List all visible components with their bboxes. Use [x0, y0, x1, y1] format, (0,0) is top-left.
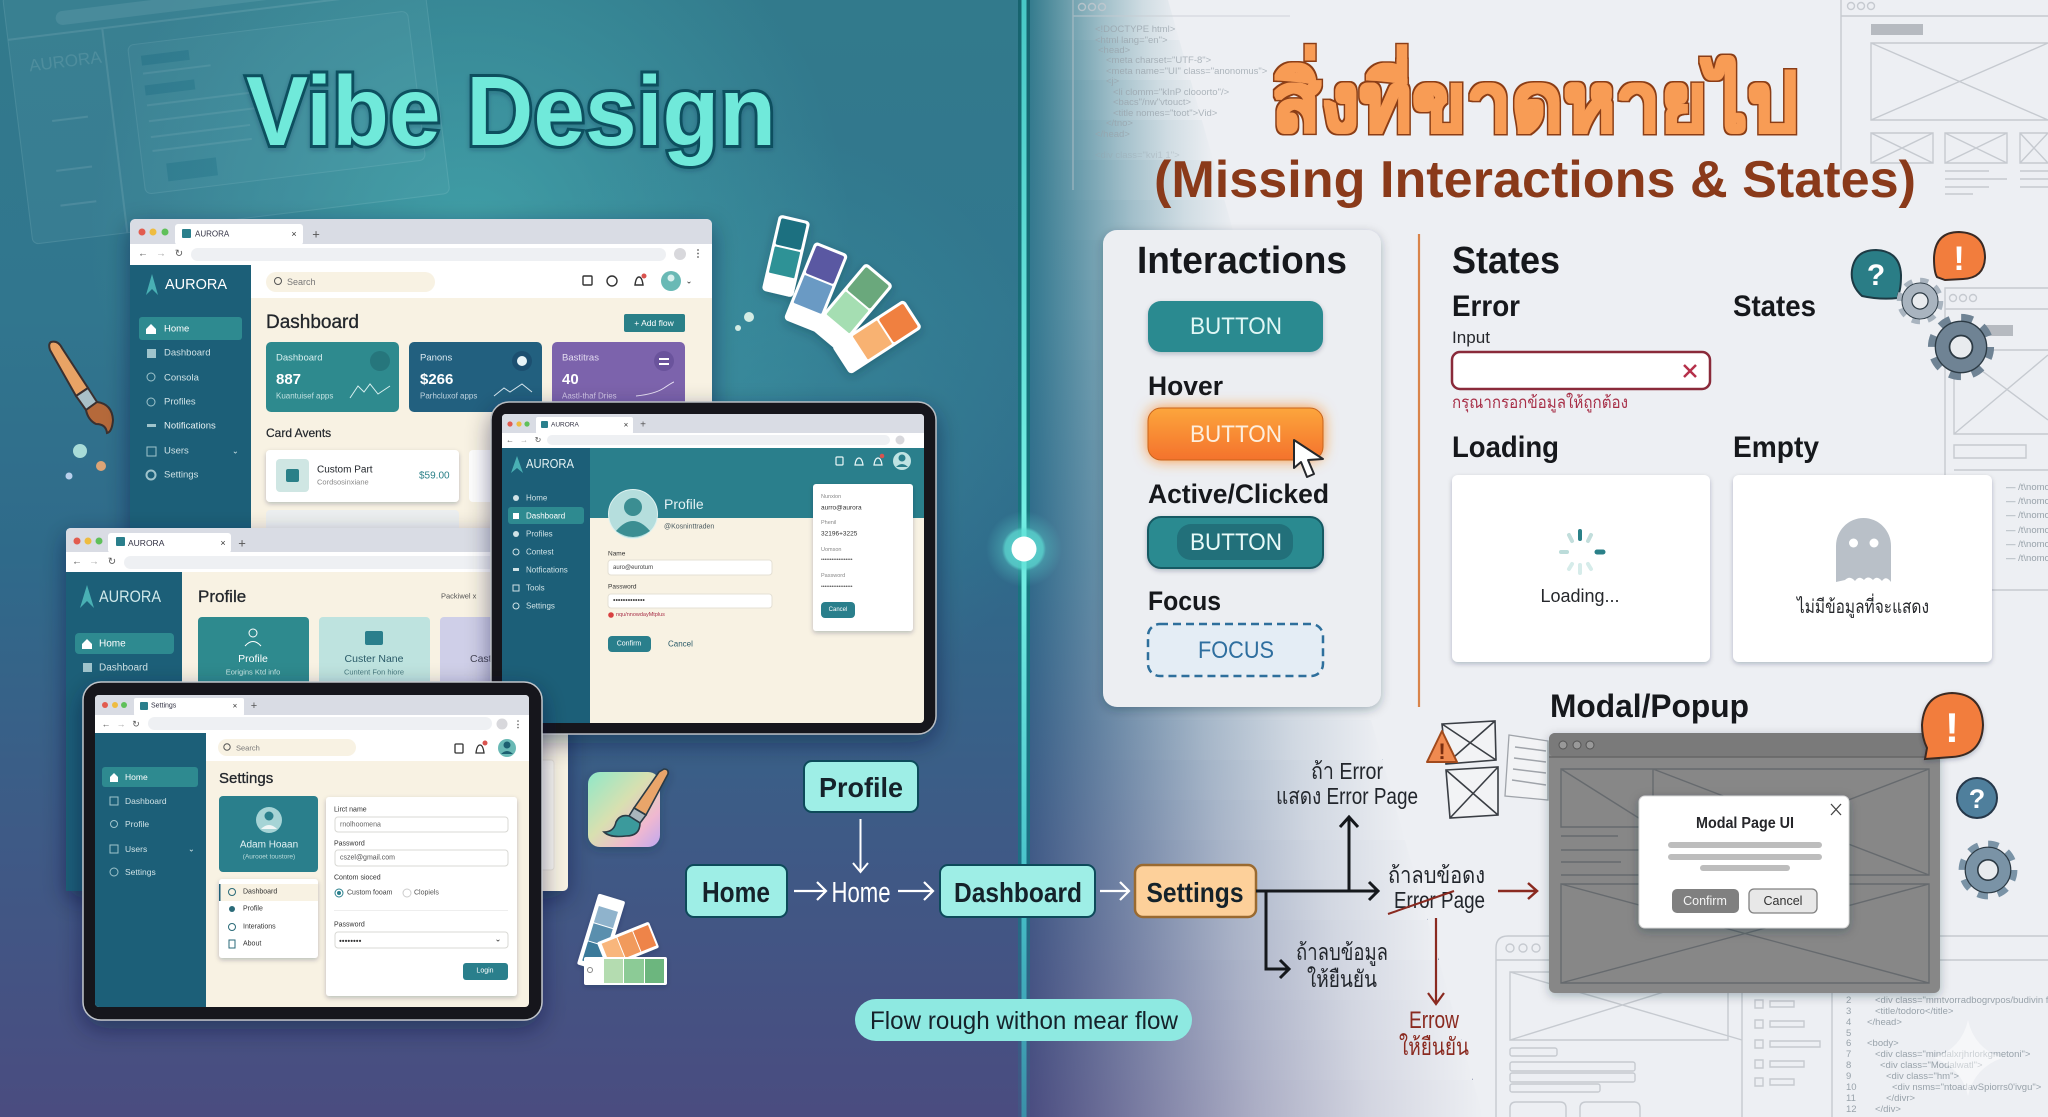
icon: ghost — [1836, 518, 1891, 582]
sidebar: AURORA — [165, 277, 227, 293]
branch label: if deleted, error page — [1388, 862, 1485, 914]
wireframe and code, bottom right: <div class="mindalxrjhrlorkgmetoni"> — [1875, 1049, 2031, 1060]
wireframe and code, bottom right: 11 — [1846, 1093, 1856, 1104]
sidebar: Home — [125, 772, 148, 782]
sidebar: Profiles — [164, 396, 196, 408]
stat card: Panons: Parhcluxof apps — [420, 392, 477, 400]
stat card: Dashboard: 887 — [276, 371, 301, 388]
icon: colour swatches fan, top — [762, 214, 922, 375]
heading: Modal/Popup: Modal/Popup — [1550, 688, 1749, 724]
icon: question bubble, top right — [1852, 250, 1901, 299]
form: name and password — [608, 550, 772, 618]
avatar — [608, 490, 658, 538]
subtitle: Missing Interactions & States: (Missing Interactions & States) — [1154, 151, 1916, 209]
faint background browser, top left: AURORA — [28, 48, 103, 75]
branch label: confirm delete: ให้ยืนยัน — [1307, 966, 1377, 992]
flow node: Dashboard: Dashboard — [954, 877, 1082, 908]
title: Vibe Design: Vibe Design — [246, 56, 776, 166]
address bar — [95, 715, 529, 733]
top bar — [251, 265, 712, 298]
tile: Custer Name — [319, 617, 430, 687]
menu card — [219, 879, 318, 958]
sidebar: Home — [526, 494, 548, 502]
menu card: About — [243, 940, 261, 948]
code panel, top of right side — [1073, 0, 1290, 190]
address bar: ← — [102, 719, 110, 729]
icon: question circle — [1957, 778, 1997, 818]
wireframe and code, bottom right: <body> — [1867, 1038, 1899, 1049]
address bar: → — [89, 556, 99, 568]
address bar: ↻ — [132, 719, 140, 729]
icon: exclamation bubble — [1922, 693, 1983, 759]
menu card: Interations — [243, 924, 276, 930]
address bar: → — [520, 436, 528, 444]
sidebar: Notifications — [164, 420, 216, 432]
code panel, top of right side: <li clomm="kInP clooorto"/> — [1113, 87, 1230, 98]
decorative dots near swatches — [735, 312, 754, 331]
sidebar: Settings — [125, 867, 156, 877]
list card: second — [469, 450, 529, 502]
detail card: Uomson — [821, 547, 841, 553]
detail card: Password — [821, 573, 845, 579]
code panel, top of right side: <meta name="UI" class="anonomus"> — [1106, 66, 1268, 77]
error input field — [1452, 352, 1710, 389]
top bar: Search — [287, 277, 316, 287]
panel: Interactions — [1103, 230, 1381, 707]
stat card: Panons: $266 — [420, 371, 453, 388]
wireframe and code, bottom right: </divr> — [1886, 1093, 1915, 1104]
form: name and password: auro@eurotum — [613, 565, 653, 571]
form card — [326, 797, 517, 996]
address bar: ← — [138, 248, 148, 260]
heading: States: States — [1452, 240, 1560, 282]
caption pill: Flow rough withon mear flow — [870, 1007, 1179, 1035]
branch label: if deleted, error page: ถ้าลบข้อดง — [1388, 862, 1485, 888]
wireframe and code, bottom right: <div class="Modalwatl"> — [1880, 1060, 1983, 1071]
wireframe sketches beside modal — [1427, 721, 1548, 818]
form card: •••••••• — [339, 936, 362, 946]
address bar: ← — [506, 436, 514, 444]
stat card: Bastitras: Bastitras — [562, 352, 599, 364]
icon: gear — [1964, 846, 2012, 894]
placeholder text bars — [1668, 842, 1822, 871]
icon: question bubble, top right: ? — [1867, 259, 1885, 292]
icon: exclamation bubble, top right — [1934, 232, 1985, 280]
form card: ⌄ — [495, 934, 501, 944]
icon: paintbrush tile — [588, 769, 668, 847]
button: focus: FOCUS — [1198, 637, 1274, 664]
tile: Profile: Profile — [238, 653, 268, 665]
heading: Settings: Settings — [219, 770, 273, 787]
address bar: ↻ — [108, 556, 116, 568]
stat card: Bastitras: 40 — [562, 371, 579, 388]
error message: กรุณากรอกข้อมูลให้ถูกต้อง — [1452, 392, 1628, 413]
list card: third — [266, 510, 459, 550]
small label: Packiwel: Packiwel x — [441, 592, 477, 600]
label: no data: ไม่มีข้อมูลที่จะแสดง — [1795, 593, 1929, 618]
tile: Custer Name: Custer Nane — [345, 653, 404, 665]
detail card — [813, 484, 913, 631]
form: name and password: nqu/nnowdayMtplus — [616, 612, 665, 618]
sidebar: Home — [99, 638, 126, 650]
code panel, top of right side: <div class="kvi1 1"> — [1095, 150, 1180, 161]
swatch card: green — [811, 262, 893, 352]
tile: third — [440, 617, 500, 687]
heading: Loading: Loading — [1452, 431, 1559, 464]
teal header band — [590, 448, 924, 518]
sidebar: Home — [164, 324, 189, 334]
button: Add flow — [624, 314, 685, 332]
tab bar — [66, 528, 568, 553]
tablet: Profile screen — [491, 402, 936, 734]
modal title: Modal Page UI — [1696, 815, 1794, 832]
heading: Card Avents: Card Avents — [266, 426, 331, 440]
arrow: Home label to Dashboard — [898, 882, 933, 900]
code panel, top of right side: <head> — [1098, 45, 1131, 56]
sidebar: Profiles — [526, 530, 553, 538]
tab bar — [130, 219, 712, 245]
branch label: confirm delete: ถ้าลบข้อมูล — [1296, 939, 1388, 966]
address bar: ⋮ — [514, 719, 522, 729]
form card: Custom fooam — [347, 890, 393, 896]
detail card: •••••••••••••••••• — [821, 557, 853, 563]
white panel behind tablet — [530, 760, 554, 870]
detail card: Nunxion — [821, 494, 841, 500]
centre divider line with glowing orb — [986, 0, 1062, 1117]
sketch: image placeholders — [1442, 721, 1498, 818]
top bar: ⌄ — [686, 276, 692, 286]
swatch card: teal — [762, 214, 810, 298]
heading: Empty: Empty — [1733, 431, 1819, 464]
branch label: if error show error page: แสดง Error Page — [1276, 783, 1418, 809]
title: Thai heading: สิ่งที่ขาดหายไป — [1272, 46, 1798, 149]
code panel, top of right side: </tno> — [1106, 118, 1133, 129]
button: Add flow: + Add flow — [634, 318, 675, 328]
button: default: BUTTON — [1190, 313, 1282, 340]
sidebar: Profile — [125, 819, 149, 829]
tab bar: AURORA — [128, 538, 165, 548]
wireframe and code, bottom right: 12 — [1846, 1104, 1857, 1115]
user card: Adam Hoaan — [240, 840, 298, 850]
sidebar: Contest — [526, 548, 554, 556]
branch label: confirm delete — [1296, 939, 1388, 992]
sidebar — [66, 572, 182, 891]
tab bar: × — [624, 420, 629, 430]
wireframe and code, bottom right: 8 — [1846, 1060, 1851, 1071]
tab bar: Settings — [151, 702, 177, 710]
wireframe and code, bottom right: <div nsms="ntoadavSpiorrs0'ivgu"> — [1892, 1082, 2042, 1093]
list card: Custom Part: Custom Part — [317, 464, 373, 476]
sidebar: Users — [125, 844, 147, 854]
sidebar — [95, 733, 206, 1007]
tab bar: AURORA — [551, 422, 579, 428]
heading: Dashboard: Dashboard — [266, 312, 359, 333]
red arrow right — [1498, 883, 1537, 899]
profile name: Profile — [664, 496, 704, 512]
swatch card: indigo — [784, 241, 848, 333]
caption pill — [855, 999, 1192, 1041]
sidebar: Settings — [526, 602, 555, 610]
form: name and password: Password — [608, 584, 637, 590]
button: Confirm — [1672, 889, 1739, 913]
user card — [219, 796, 318, 872]
red arrow down — [1428, 918, 1444, 1004]
branch label: if error show error page — [1276, 758, 1418, 809]
button: Cancel: Cancel — [668, 640, 693, 648]
label: Input: Input — [1452, 328, 1490, 347]
arrow: Home to Home label — [794, 882, 826, 900]
address bar: → — [156, 248, 166, 260]
flow node: Home: Home — [702, 877, 770, 909]
wireframe, top right — [1841, 0, 2048, 194]
code panel, top of right side: <title nomes="toot">Vid> — [1113, 108, 1218, 119]
stat card: Dashboard — [266, 342, 399, 412]
flow node: Profile — [804, 761, 918, 812]
list card: Custom Part: $59.00 — [419, 470, 450, 482]
tab bar: AURORA — [195, 230, 230, 238]
button: active: BUTTON — [1190, 529, 1282, 556]
form: name and password: Name — [608, 550, 626, 558]
wireframe and code, bottom right: <div class="hm"> — [1886, 1071, 1959, 1082]
button: hover — [1148, 408, 1323, 460]
faint background browser, top left — [3, 0, 450, 244]
sketch: document — [1505, 735, 1548, 800]
form card: rnolhoomena — [340, 822, 381, 828]
top bar — [206, 733, 529, 761]
arrow: Dashboard to Settings — [1100, 882, 1129, 900]
sidebar: AURORA — [99, 587, 162, 606]
address bar: ↻ — [535, 436, 541, 444]
close button — [1831, 804, 1841, 815]
tile: Profile: Eorigins Ktd info — [226, 668, 280, 676]
flow node: Settings: Settings — [1146, 877, 1244, 908]
tab bar: × — [233, 702, 238, 710]
flow node: Dashboard — [940, 865, 1095, 917]
icon: large gear — [1934, 320, 1988, 374]
detail card: Phenil — [821, 520, 836, 526]
state card: Empty — [1733, 475, 1992, 662]
tab bar: + — [312, 226, 320, 242]
sidebar — [130, 265, 251, 579]
address bar: ↻ — [175, 248, 183, 260]
red label: Errow confirm — [1399, 1007, 1469, 1061]
code panel, top of right side: <meta charset="UTF-8"> — [1106, 55, 1212, 66]
button: active — [1148, 517, 1323, 568]
address bar — [502, 433, 924, 448]
tab bar — [95, 695, 529, 716]
branch label: if deleted, error page: Error Page — [1394, 887, 1485, 913]
list card: Custom Part — [266, 450, 459, 502]
icon: small gear — [1901, 282, 1939, 320]
user card: (Aurooet toustore) — [243, 854, 295, 860]
modal dialog — [1639, 796, 1849, 928]
sidebar: Dashboard — [99, 662, 148, 674]
form card: Clopiels — [414, 890, 439, 896]
modal wireframe window — [1549, 733, 1940, 993]
tab bar — [502, 414, 924, 434]
icon: warning triangle: ! — [1438, 739, 1446, 764]
menu card: Profile — [243, 906, 263, 912]
form: name and password: ••••••••••••• — [613, 598, 645, 604]
stat card: Bastitras: Aastl-thaf Dries — [562, 392, 617, 400]
detail card: Cancel — [829, 607, 847, 613]
form card: Login — [476, 968, 494, 974]
tile: third: Cast — [470, 653, 492, 665]
icon: large paintbrush — [49, 342, 113, 433]
address bar: → — [116, 719, 126, 729]
tile: Profile — [198, 617, 309, 687]
address bar: ← — [72, 556, 82, 568]
wireframe and code, bottom right: <title/todoro</title> — [1875, 1006, 1954, 1017]
list card: Custom Part: Cordsosinxiane — [317, 478, 369, 486]
flow label: Home: Home — [832, 877, 890, 909]
wireframe and code, bottom right: 2 — [1846, 995, 1851, 1006]
wireframe and code, bottom right: 5 — [1846, 1028, 1851, 1039]
state: Error — [1452, 290, 1710, 413]
stat card: Panons — [409, 342, 542, 412]
label: Active/Clicked: Active/Clicked — [1148, 479, 1329, 509]
wireframe and code, bottom right: 7 — [1846, 1049, 1851, 1060]
button: Cancel: Cancel — [1764, 894, 1802, 908]
wireframe and code, bottom right: 3 — [1846, 1006, 1851, 1017]
heading: States (second): States — [1733, 290, 1816, 323]
top bar: Search — [236, 744, 260, 752]
sidebar: Notfications — [526, 566, 568, 574]
code panel, top of right side: <!DOCTYPE html> — [1095, 24, 1176, 35]
sidebar: Dashboard — [526, 512, 565, 520]
address bar — [130, 244, 712, 265]
button: Cancel — [1749, 889, 1817, 913]
label: Hover: Hover — [1148, 371, 1223, 401]
icon: mouse cursor — [1294, 440, 1323, 477]
button: Confirm — [608, 636, 651, 652]
tab bar: × — [291, 229, 297, 239]
branch arrows from Settings — [1256, 817, 1378, 978]
tab bar: + — [251, 700, 257, 712]
button: Confirm: Confirm — [1683, 894, 1727, 908]
code panel, top of right side: <j> — [1106, 76, 1120, 87]
icon: exclamation bubble: ! — [1945, 704, 1959, 751]
wireframe, mid right — [1945, 288, 2048, 590]
stat card: Dashboard: Kuantuisef apps — [276, 392, 333, 400]
wireframe and code, bottom right: </head> — [1867, 1017, 1902, 1028]
flow node: Home — [686, 865, 787, 917]
flow node: Profile: Profile — [819, 772, 903, 803]
header icons — [836, 452, 911, 470]
branch label: if error show error page: ถ้า Error — [1311, 758, 1383, 784]
flow node: Settings — [1135, 865, 1256, 917]
icon: question circle: ? — [1969, 784, 1985, 814]
wireframe and code, bottom right: </div> — [1875, 1104, 1901, 1115]
form card: Lirct name — [334, 806, 367, 814]
sidebar: Dashboard — [164, 348, 210, 358]
wireframe and code, bottom right: 4 — [1846, 1017, 1851, 1028]
heading: Interactions: Interactions — [1137, 240, 1347, 282]
sidebar: ⌄ — [232, 446, 239, 456]
button: focus — [1148, 624, 1323, 676]
sidebar: AURORA — [526, 457, 575, 471]
address bar — [66, 552, 568, 572]
sidebar: Tools — [526, 584, 545, 592]
faint card — [127, 11, 426, 194]
browser window: Profile — [66, 528, 568, 891]
icon: small colour swatches — [577, 893, 667, 985]
stat card: Panons: Panons — [420, 352, 452, 364]
browser window: Dashboard — [130, 219, 712, 579]
red label: Errow confirm: Errow — [1409, 1007, 1460, 1034]
button: hover: BUTTON — [1190, 421, 1282, 448]
decorative dots near brush — [66, 444, 106, 480]
red label: Errow confirm: ให้ยืนยัน — [1399, 1033, 1469, 1061]
sidebar: Settings — [164, 470, 199, 480]
address bar: ⋮ — [693, 248, 703, 260]
label: Focus: Focus — [1148, 586, 1221, 616]
tab bar: + — [238, 536, 246, 550]
detail card: 32196+3225 — [821, 530, 858, 538]
wireframe and code, bottom right: 10 — [1846, 1082, 1857, 1093]
button: default — [1148, 301, 1323, 352]
stat card: Bastitras — [552, 342, 685, 412]
tablet: Settings screen — [83, 682, 542, 1020]
tab bar: + — [640, 420, 646, 430]
sidebar: Users — [164, 446, 189, 456]
label: Loading...: Loading... — [1540, 586, 1620, 606]
sidebar: Consola — [164, 372, 200, 384]
detail card: •••••••••••••••••• — [821, 584, 853, 590]
state card: Loading — [1452, 475, 1710, 662]
form card: Password — [334, 840, 365, 848]
tab bar: × — [220, 538, 226, 548]
stat card: Dashboard: Dashboard — [276, 352, 322, 364]
wireframe and code, bottom right — [1496, 936, 2048, 1117]
code panel, top of right side: <html lang="en"> — [1095, 35, 1168, 46]
sidebar — [502, 448, 590, 723]
arrow: Profile to Home — [853, 819, 868, 872]
sidebar: ⌄ — [188, 844, 195, 854]
profile handle: @Kosninttraden — [664, 524, 714, 530]
wireframe and code, bottom right: 6 — [1846, 1038, 1851, 1049]
code panel, top of right side: </head> — [1095, 129, 1130, 140]
heading: Profile: Profile — [198, 587, 246, 606]
form card: cszel@gmail.com — [340, 854, 395, 862]
icon: exclamation bubble, top right: ! — [1953, 240, 1965, 278]
form card: Password — [334, 922, 365, 928]
menu card: Dashboard — [243, 888, 277, 896]
icon: spinner — [1561, 531, 1603, 573]
state: Error: Error — [1452, 290, 1520, 323]
wireframe and code, bottom right: 9 — [1846, 1071, 1851, 1082]
detail card: aurro@aurora — [821, 504, 862, 512]
form card: Contom sioced — [334, 874, 381, 882]
button: Confirm: Confirm — [617, 640, 641, 648]
tile: Custer Name: Cuntent Fon hiore — [344, 668, 404, 676]
sidebar: Dashboard — [125, 796, 167, 806]
swatch card: orange — [832, 299, 922, 375]
code panel, top of right side: <bacs"/nw"vtouct> — [1113, 97, 1191, 108]
